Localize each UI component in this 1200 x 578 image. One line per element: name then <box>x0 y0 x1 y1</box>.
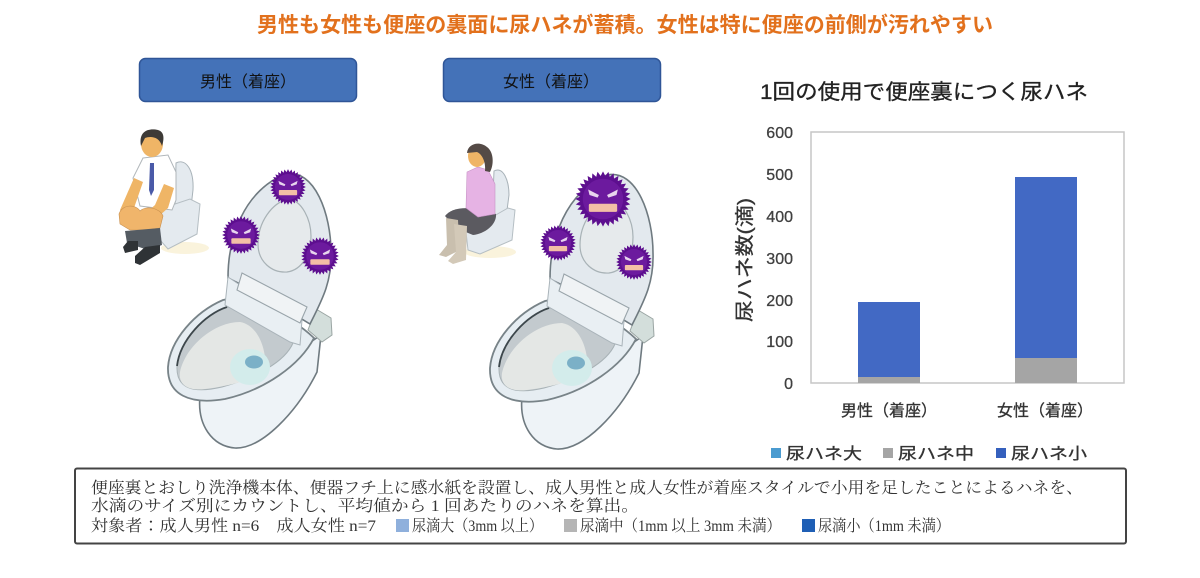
icon: toilet with germs, male <box>168 166 342 448</box>
chart legend: 尿ハネ中 <box>898 445 974 463</box>
icon: germ left <box>219 213 263 257</box>
note text line 1: 便座裏とおしり洗浄機本体、便器フチ上に感水紙を設置し、成人男性と成人女性が着座スタイルで小用を足したことによるハネを、 <box>91 478 1083 497</box>
y axis labels: 300 <box>766 251 793 268</box>
note legend: small: 尿滴小（1mm 未満） <box>818 517 950 535</box>
note legend: medium: 尿滴中（1mm 以上 3mm 未満） <box>580 517 781 535</box>
icon: germ right <box>613 241 655 283</box>
button: female seated <box>444 58 660 102</box>
y axis labels <box>766 125 793 393</box>
y axis labels: 500 <box>766 167 793 184</box>
icon: toilet with germs, female <box>490 166 655 449</box>
bar chart <box>734 125 1124 420</box>
icon: germ large top <box>570 166 636 232</box>
x axis labels <box>841 402 1093 420</box>
chart legend: 尿ハネ小 <box>1011 445 1087 463</box>
y axis labels: 600 <box>766 125 793 142</box>
note box <box>75 468 1126 544</box>
button: male seated: 男性（着座） <box>200 73 296 91</box>
icon: seated woman <box>439 144 516 264</box>
y axis title: 尿ハネ数(滴) <box>734 198 756 322</box>
y axis labels: 400 <box>766 209 793 226</box>
icon: seated man <box>119 129 209 265</box>
x axis labels: 男性（着座） <box>841 402 937 420</box>
button: female seated: 女性（着座） <box>503 73 599 91</box>
y axis labels: 100 <box>766 334 793 351</box>
x axis labels: 女性（着座） <box>997 402 1093 420</box>
chart legend <box>771 445 1087 463</box>
note text line 3: 対象者：成人男性 n=6 成人女性 n=7 <box>91 517 376 535</box>
bar: male <box>858 302 920 383</box>
bar: female <box>1015 177 1077 383</box>
icon: germ right <box>298 234 342 278</box>
note legend: large: 尿滴大（3mm 以上） <box>412 517 543 535</box>
icon: germ left <box>537 222 579 264</box>
title: 男性も女性も便座の裏面に尿ハネが蓄積。女性は特に便座の前側が汚れやすい <box>257 13 993 37</box>
y axis labels: 200 <box>766 293 793 310</box>
note text line 2: 水滴のサイズ別にカウントし、平均値から 1 回あたりのハネを算出。 <box>91 497 639 515</box>
chart legend: 尿ハネ大 <box>786 445 862 463</box>
button: male seated <box>140 58 356 102</box>
y axis labels: 0 <box>784 376 793 393</box>
icon: germ top <box>267 166 309 208</box>
chart title: 1回の使用で便座裏につく尿ハネ <box>760 81 1088 104</box>
